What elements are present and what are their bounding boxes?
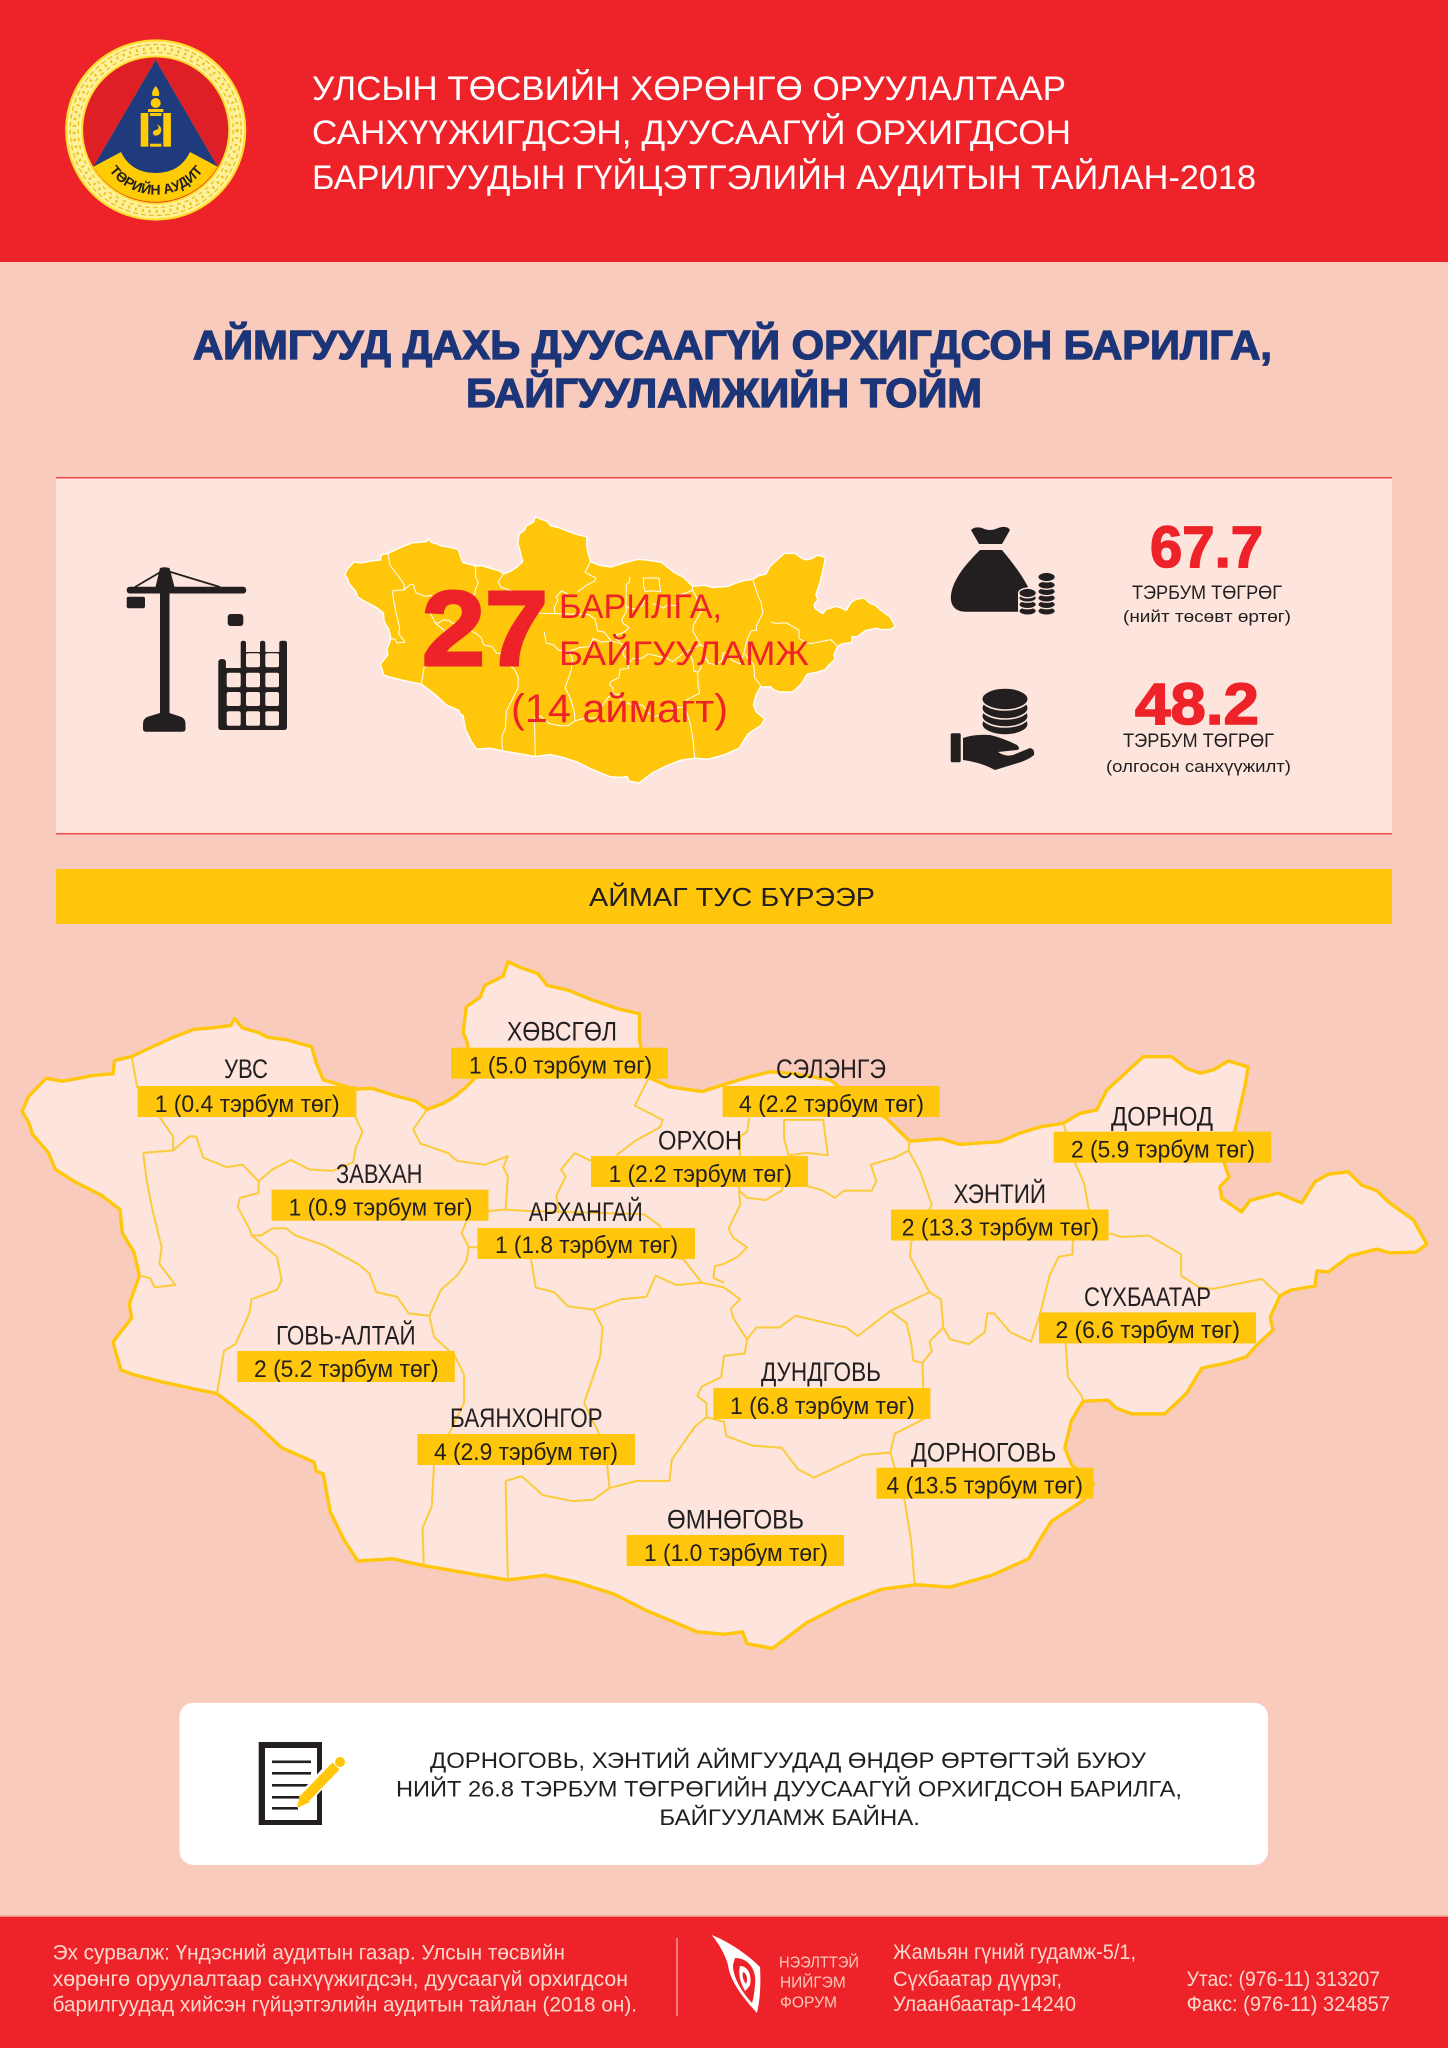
small map of Mongolia: [345, 517, 895, 783]
logo: open society forum: НИЙГЭМ: [780, 1973, 846, 1991]
province label: Govi-Altai: [237, 1320, 455, 1383]
province label: Umnugovi: ӨМНӨГОВЬ: [667, 1504, 804, 1534]
province label: Govi-Altai: ГОВЬ-АЛТАЙ: [276, 1320, 416, 1350]
province label: Khuvsgul: ХӨВСГӨЛ: [507, 1017, 617, 1047]
province label: Uvs: 1 (0.4 тэрбум төг): [155, 1091, 340, 1118]
province label: Arkhangai: 1 (1.8 тэрбум төг): [495, 1232, 678, 1259]
header title: УЛСЫН ТӨСВИЙН ХӨРӨНГӨ ОРУУЛАЛТААР: [312, 70, 1066, 108]
province label: Zavkhan: [272, 1159, 488, 1222]
contact numbers: Факс: (976-11) 324857: [1187, 1993, 1390, 2016]
province label: Dornogovi: ДОРНОГОВЬ: [911, 1438, 1056, 1468]
callout: 27 buildings in 14 provinces: БАРИЛГА,: [559, 588, 722, 626]
stat: funding received: 48.2: [1135, 672, 1259, 737]
footer band: [0, 1916, 1448, 2048]
callout: 27 buildings in 14 provinces: (14 аймагт): [511, 687, 728, 731]
province label: Zavkhan: ЗАВХАН: [336, 1159, 422, 1189]
source note: барилгуудад хийсэн гүйцэтгэлийн аудитын тайлан (2018 он).: [53, 1994, 637, 2017]
province label: Orkhon: [591, 1126, 808, 1188]
stat: total budget cost: ТЭРБУМ ТӨГРӨГ: [1132, 583, 1282, 604]
province label: Selenge: [723, 1054, 940, 1118]
province label: Umnugovi: 1 (1.0 тэрбум төг): [644, 1540, 828, 1567]
main heading: БАЙГУУЛАМЖИЙН ТОЙМ: [466, 370, 982, 416]
logo: open society forum: [712, 1935, 859, 2013]
province label: Khuvsgul: 1 (5.0 тэрбум төг): [469, 1053, 652, 1080]
key finding text: ДОРНОГОВЬ, ХЭНТИЙ АЙМГУУДАД ӨНДӨР ӨРТӨГТЭЙ БУЮУ: [430, 1748, 1147, 1773]
panel: summary: [56, 477, 1392, 834]
province label: Dornod: 2 (5.9 тэрбум төг): [1071, 1137, 1255, 1164]
logo: state audit emblem: [65, 39, 246, 221]
logo: open society forum: ФОРУМ: [780, 1994, 837, 2011]
province label: Dundgovi: ДУНДГОВЬ: [761, 1357, 881, 1387]
section bar: by province: [56, 869, 1392, 924]
province label: Umnugovi: [627, 1504, 844, 1567]
source note: хөрөнгө оруулалтаар санхүүжигдсэн, дуусаагүй орхигдсон: [53, 1968, 628, 1991]
province label: Selenge: 4 (2.2 тэрбум төг): [739, 1091, 924, 1118]
map: provinces of Mongolia: [22, 962, 1427, 1648]
province label: Arkhangai: АРХАНГАЙ: [529, 1196, 643, 1227]
contact numbers: Утас: (976-11) 313207: [1187, 1968, 1380, 1991]
province label: Bayankhongor: [417, 1403, 635, 1466]
province label: Dornogovi: [876, 1438, 1093, 1500]
stat: total budget cost: (нийт төсөвт өртөг): [1123, 607, 1291, 626]
section bar: by province: АЙМАГ ТУС БҮРЭЭР: [589, 882, 875, 912]
province label: Sukhbaatar: 2 (6.6 тэрбум төг): [1056, 1317, 1240, 1344]
province label: Zavkhan: 1 (0.9 тэрбум төг): [289, 1195, 472, 1222]
address: Улаанбаатар-14240: [893, 1993, 1076, 2016]
icon: document and pencil: [259, 1742, 345, 1825]
address: [893, 1941, 1136, 2016]
province label: Khentii: ХЭНТИЙ: [954, 1178, 1046, 1209]
province label: Uvs: [138, 1054, 356, 1118]
province label: Govi-Altai: 2 (5.2 тэрбум төг): [254, 1356, 439, 1383]
key finding text: НИЙТ 26.8 ТЭРБУМ ТӨГРӨГИЙН ДУУСААГҮЙ ОРХИГДСОН БАРИЛГА,: [396, 1777, 1182, 1802]
header title: САНХҮҮЖИГДСЭН, ДУУСААГҮЙ ОРХИГДСОН: [312, 114, 1071, 152]
stat: total budget cost: [1123, 515, 1291, 626]
main heading: [193, 322, 1272, 416]
address: Жамьян гүний гудамж-5/1,: [893, 1941, 1136, 1964]
icon: hand holding coins: [951, 688, 1034, 770]
stat: funding received: (олгосон санхүүжилт): [1106, 757, 1291, 776]
province label: Selenge: СЭЛЭНГЭ: [776, 1054, 886, 1084]
header title: [312, 70, 1256, 197]
province label: Uvs: УВС: [224, 1054, 268, 1084]
stat: funding received: [1106, 672, 1291, 776]
callout: 27 buildings in 14 provinces: 27: [422, 570, 548, 688]
province label: Dornogovi: 4 (13.5 тэрбум төг): [886, 1473, 1083, 1500]
key finding text: БАЙГУУЛАМЖ БАЙНА.: [659, 1805, 920, 1830]
province label: Dornod: [1054, 1102, 1271, 1164]
province label: Khuvsgul: [451, 1017, 668, 1080]
province label: Arkhangai: [477, 1196, 695, 1259]
callout: 27 buildings in 14 provinces: БАЙГУУЛАМЖ: [559, 635, 809, 673]
source note: Эх сурвалж: Үндэсний аудитын газар. Улсын төсвийн: [53, 1941, 565, 1964]
stat: funding received: ТЭРБУМ ТӨГРӨГ: [1123, 731, 1274, 752]
logo: open society forum: НЭЭЛТТЭЙ: [779, 1954, 859, 1972]
address: Сүхбаатар дүүрэг,: [893, 1968, 1062, 1991]
province label: Khentii: 2 (13.3 тэрбум төг): [902, 1214, 1099, 1242]
province label: Dundgovi: 1 (6.8 тэрбум төг): [730, 1393, 915, 1420]
main heading: АЙМГУУД ДАХЬ ДУУСААГҮЙ ОРХИГДСОН БАРИЛГА,: [193, 322, 1272, 368]
source note: [53, 1941, 637, 2017]
province label: Khentii: [891, 1178, 1109, 1242]
callout: 27 buildings in 14 provinces: [422, 570, 809, 731]
province label: Dornod: ДОРНОД: [1111, 1102, 1213, 1132]
header band: [0, 0, 1448, 262]
logo: state audit emblem: ТӨРИЙН АУДИТ: [111, 164, 201, 195]
icon: crane and building: [127, 567, 287, 732]
province label: Bayankhongor: 4 (2.9 тэрбум төг): [434, 1439, 618, 1466]
province label: Dundgovi: [713, 1357, 930, 1420]
province label: Sukhbaatar: СҮХБААТАР: [1084, 1282, 1211, 1312]
header title: БАРИЛГУУДЫН ГҮЙЦЭТГЭЛИЙН АУДИТЫН ТАЙЛАН-2018: [312, 159, 1256, 197]
province label: Orkhon: ОРХОН: [658, 1126, 742, 1156]
province label: Bayankhongor: БАЯНХОНГОР: [450, 1403, 603, 1433]
province label: Orkhon: 1 (2.2 тэрбум төг): [609, 1161, 792, 1188]
key finding text: [396, 1748, 1182, 1830]
province label: Sukhbaatar: [1039, 1282, 1256, 1344]
contact numbers: [1187, 1968, 1390, 2016]
icon: money bag with coins: [951, 527, 1055, 615]
panel: key finding: [180, 1703, 1268, 1865]
stat: total budget cost: 67.7: [1150, 515, 1263, 580]
